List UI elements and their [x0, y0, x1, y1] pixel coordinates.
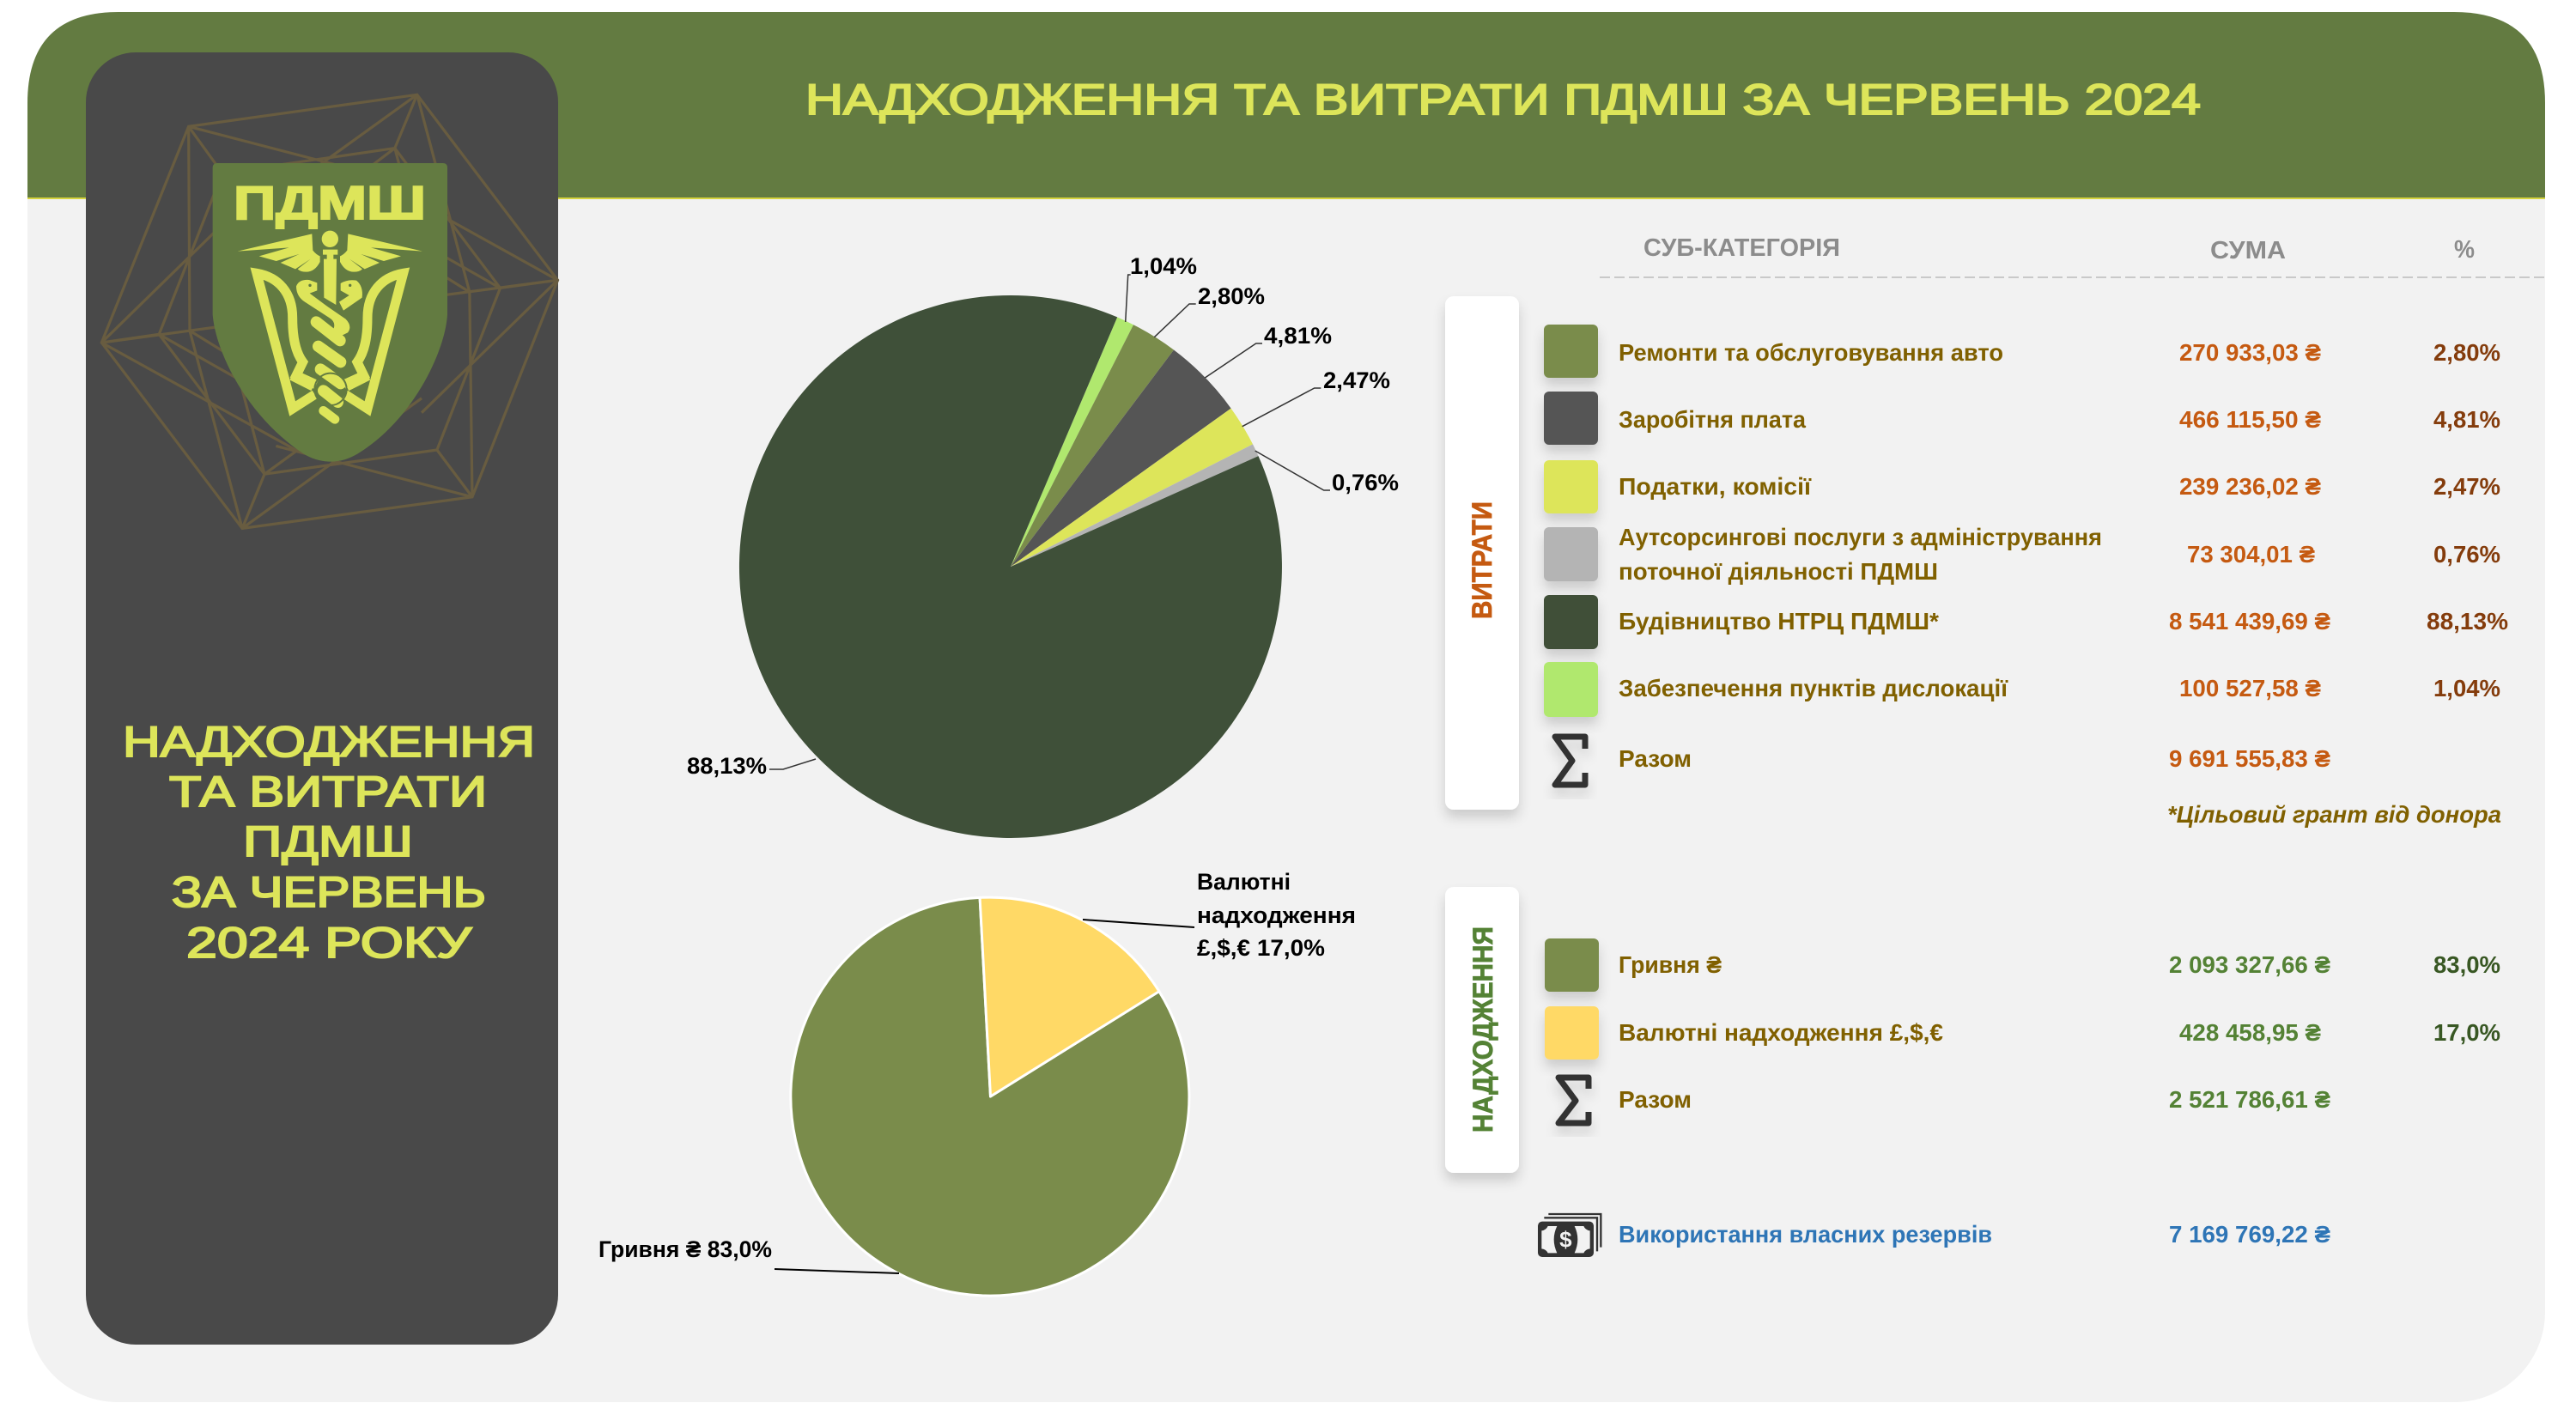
row: taxes: 239 236,02 ₴: [2179, 473, 2321, 500]
tab label: expenses: ВИТРАТИ: [1467, 501, 1498, 619]
sidebar heading: ЗА ЧЕРВЕНЬ: [172, 868, 486, 916]
row: construction: 88,13%: [2427, 608, 2508, 635]
row: salary: 466 115,50 ₴: [2179, 406, 2321, 433]
row: foreign currency: Валютні надходження £,$,€: [1619, 1019, 1943, 1046]
sidebar heading: НАДХОДЖЕННЯ: [123, 718, 535, 766]
footnote: *Цільовий грант від донора: [2167, 801, 2501, 828]
row: salary: Заробітня плата: [1619, 406, 1806, 433]
row: own reserves: 7 169 769,22 ₴: [2169, 1221, 2330, 1248]
row: hryvnia: Гривня ₴: [1619, 951, 1722, 978]
income labels: надходження: [1197, 902, 1356, 928]
row: deployment points: Забезпечення пунктів дислокації: [1619, 675, 2008, 701]
pie value labels: 2,47%: [1323, 367, 1390, 393]
row: outsourcing: поточної діяльності ПДМШ: [1619, 558, 1938, 585]
table header: [1600, 234, 2548, 277]
tab: expenses: [1445, 296, 1519, 810]
tab label: income: НАДХОДЖЕННЯ: [1467, 926, 1498, 1133]
sidebar heading: [123, 718, 535, 967]
row: car repairs: Ремонти та обслуговування авто: [1619, 339, 2003, 366]
title: НАДХОДЖЕННЯ ТА ВИТРАТИ ПДМШ ЗА ЧЕРВЕНЬ 2024: [805, 76, 2201, 124]
row: taxes: 2,47%: [2433, 473, 2500, 500]
row: income total: 2 521 786,61 ₴: [2169, 1086, 2330, 1113]
row: taxes: Податки, комісії: [1619, 473, 1812, 500]
icon: banknotes: [1538, 1214, 1601, 1257]
row: car repairs: 270 933,03 ₴: [2179, 339, 2321, 366]
icon: shield logo: [213, 163, 447, 462]
income labels: Валютні: [1197, 869, 1291, 895]
pie value labels: 1,04%: [1130, 253, 1197, 279]
row: expenses total: 9 691 555,83 ₴: [2169, 745, 2330, 772]
row: construction: Будівництво НТРЦ ПДМШ*: [1619, 608, 1939, 635]
pie value labels: 4,81%: [1264, 323, 1332, 349]
icon: banknotes: $: [1559, 1227, 1572, 1253]
pie value labels: 2,80%: [1198, 283, 1265, 309]
row: hryvnia: 2 093 327,66 ₴: [2169, 951, 2330, 978]
row: outsourcing: 73 304,01 ₴: [2187, 541, 2315, 568]
pie value labels: [687, 253, 1399, 779]
logo wordmark: ПДМШ: [234, 176, 426, 229]
pie value labels: 88,13%: [687, 753, 767, 779]
pie chart: income: [598, 869, 1356, 1296]
row: hryvnia: 83,0%: [2433, 951, 2500, 978]
row: taxes: [1544, 460, 2500, 513]
row: construction: [1544, 595, 2508, 649]
pie leader lines: [769, 275, 1330, 769]
sidebar heading: ТА ВИТРАТИ: [169, 768, 487, 816]
table header: %: [2454, 236, 2475, 264]
row: own reserves: Використання власних резервів: [1619, 1221, 1992, 1248]
row: expenses total: [1555, 737, 2330, 785]
sidebar heading: 2024 РОКУ: [186, 919, 471, 967]
row: hryvnia: [1545, 938, 2500, 992]
table header: СУМА: [2210, 237, 2286, 264]
row: car repairs: 2,80%: [2433, 339, 2500, 366]
row: foreign currency: 428 458,95 ₴: [2179, 1019, 2321, 1046]
row: deployment points: 100 527,58 ₴: [2179, 675, 2321, 701]
table header: СУБ-КАТЕГОРІЯ: [1643, 234, 1840, 262]
row: construction: 8 541 439,69 ₴: [2169, 608, 2330, 635]
row: expenses total: Разом: [1619, 745, 1692, 772]
row: income total: Разом: [1619, 1086, 1692, 1113]
row: deployment points: [1544, 662, 2500, 717]
row: outsourcing: 0,76%: [2433, 541, 2500, 568]
pie value labels: 0,76%: [1332, 470, 1399, 495]
row: salary: 4,81%: [2433, 406, 2500, 433]
income labels: £,$,€ 17,0%: [1197, 935, 1325, 961]
income labels: [598, 869, 1356, 1262]
tab: income: [1445, 887, 1519, 1173]
header band: [27, 12, 2545, 199]
row: foreign currency: 17,0%: [2433, 1019, 2500, 1046]
row: outsourcing: Аутсорсингові послуги з адміністрування: [1619, 524, 2102, 550]
row: salary: [1544, 392, 2500, 445]
income leader lines: [775, 920, 1194, 1273]
panel: left sidebar: [86, 52, 558, 1345]
income labels: Гривня ₴ 83,0%: [598, 1236, 772, 1262]
row: outsourcing: [1544, 524, 2500, 585]
row: own reserves: [1538, 1214, 2330, 1257]
row: foreign currency: [1545, 1006, 2500, 1060]
row: car repairs: [1544, 325, 2500, 378]
pie chart: expenses: [687, 253, 1399, 838]
row: income total: [1558, 1078, 2330, 1123]
sidebar heading: ПДМШ: [243, 817, 413, 865]
decorative wireframe network: [101, 94, 558, 528]
row: deployment points: 1,04%: [2433, 675, 2500, 701]
